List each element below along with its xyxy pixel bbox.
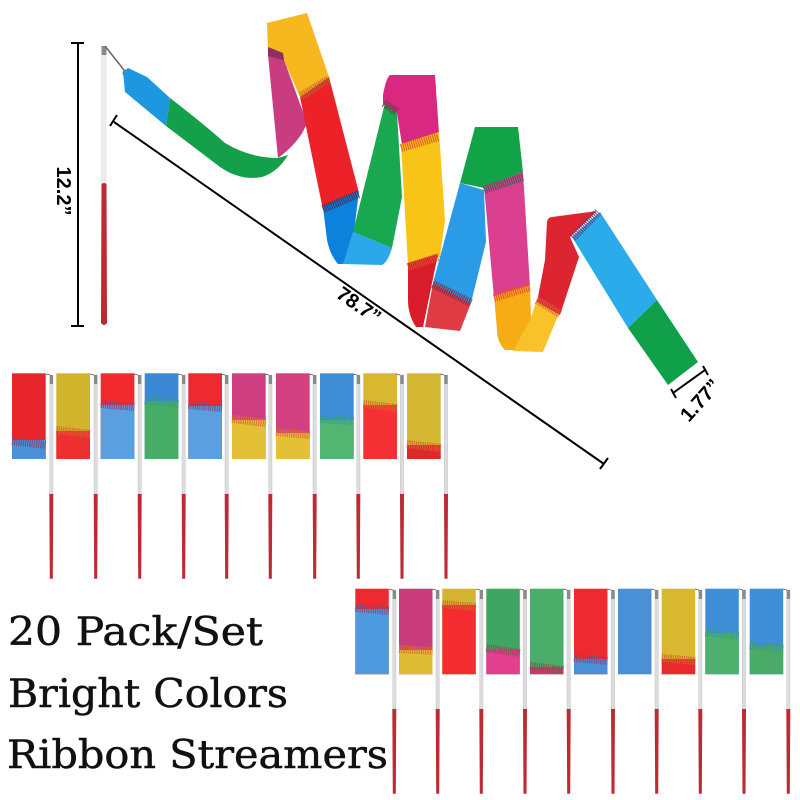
ribbon 4: green and magenta	[486, 589, 520, 674]
ribbon 10: yellow and red	[407, 373, 441, 459]
ribbon 6: red and blue	[574, 589, 608, 674]
ribbon 2: magenta and yellow	[399, 589, 432, 674]
wand sticks, lower row	[389, 589, 790, 794]
caption text	[7, 610, 388, 778]
ribbon 8: yellow and red	[662, 589, 695, 674]
ribbon 7: magenta and yellow	[276, 373, 310, 459]
ribbon 3: yellow and red	[442, 589, 476, 674]
dimension: ribbon length 78.7 inches: 78.7”	[332, 283, 385, 329]
dimension: handle length 12.2 inches: 12.2”	[52, 167, 74, 215]
ribbon 8: blue and green	[320, 373, 354, 459]
wand sticks, upper row	[46, 374, 448, 579]
ribbon 10: blue and green	[750, 589, 783, 674]
ribbon 5: red and blue	[188, 373, 222, 459]
ribbon 9: blue and green	[705, 589, 739, 674]
ribbon 3: red and blue	[101, 373, 134, 459]
large spiralling rainbow ribbon	[123, 13, 698, 385]
caption line 2: Bright Colors	[8, 672, 288, 717]
row of ten ribbon wands, upper	[12, 373, 448, 579]
ribbon 2: yellow and red	[56, 373, 90, 459]
ribbon 5: green and magenta	[530, 589, 564, 674]
ribbon 9: yellow and red	[363, 373, 397, 459]
caption line 1: 20 Pack/Set	[8, 610, 263, 655]
ribbon 7: blue	[618, 589, 652, 674]
ribbon 4: blue and green	[145, 373, 178, 459]
ribbon 6: magenta and yellow	[232, 373, 266, 459]
row of ten ribbon wands, lower	[355, 589, 790, 794]
ribbon 1: red and blue	[355, 589, 389, 674]
large ribbon wand stick	[101, 46, 129, 325]
dimension: handle length 12.2 inches	[52, 43, 84, 326]
ribbon 1: red and blue	[12, 373, 46, 459]
caption line 3: Ribbon Streamers	[7, 733, 388, 778]
dimension: ribbon width 1.77 inches: 1.77”	[676, 375, 725, 426]
dimension: ribbon length 78.7 inches	[110, 115, 608, 469]
